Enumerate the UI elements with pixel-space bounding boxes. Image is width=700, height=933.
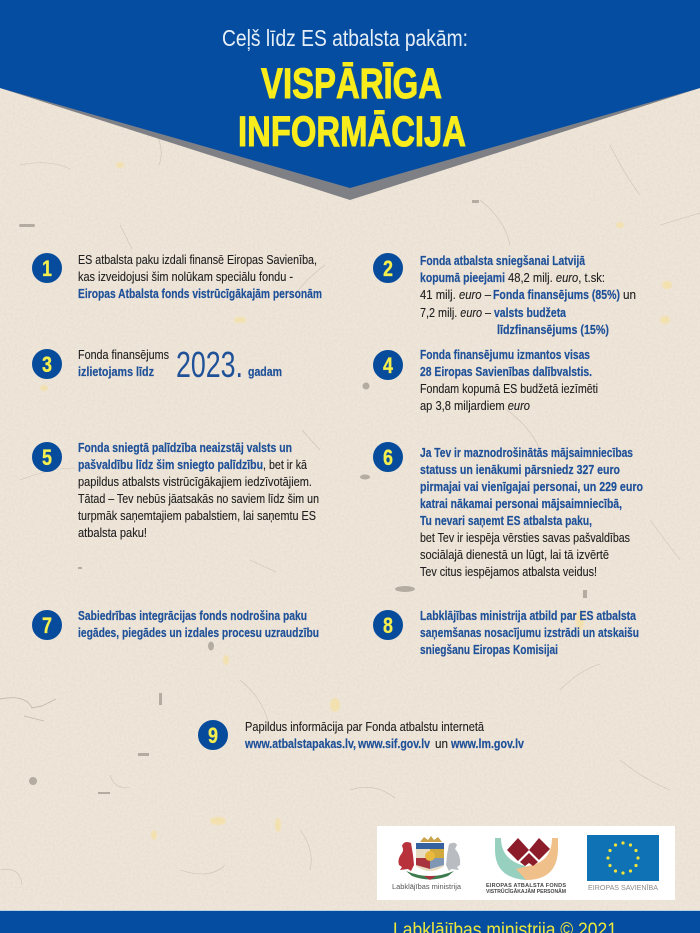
item 4 [374, 347, 598, 413]
number badge 3 [32, 350, 62, 378]
logo: EU flag [587, 835, 659, 881]
text 5: , bet ir kā [263, 457, 308, 472]
number badge 8 [374, 610, 402, 640]
text 5: papildus atbalsts vistrūcīgākajiem iedzīvotājiem. [78, 474, 312, 489]
text 6: statuss un ienākumi pārsniedz 327 euro [420, 462, 620, 477]
header banner [0, 0, 700, 200]
number badge 1 [32, 254, 62, 282]
text 8 [420, 608, 639, 657]
number badge 9: 9 [208, 723, 218, 748]
text 6 [420, 445, 643, 579]
text 4 [420, 347, 598, 413]
text 6: pirmajai vai vienīgajai personai, un 229 euro [420, 479, 643, 494]
text 9 [244, 719, 525, 751]
number badge 2 [374, 254, 402, 282]
text 2: Fonda atbalsta sniegšanai Latvijā [420, 253, 586, 268]
text 6: sociālajā dienestā un lūgt, lai tā izvērtē [420, 547, 609, 562]
logo caption: Labklājības ministrija: Labklājības ministrija [392, 882, 462, 891]
title [238, 60, 466, 156]
logo caption: fund name [486, 883, 566, 895]
text 1: kas izveidojusi šim nolūkam speciālu fondu - [78, 269, 293, 284]
number badge 8: 8 [383, 613, 393, 638]
logo: Latvian coat of arms [398, 836, 460, 880]
number badge 2: 2 [383, 256, 393, 281]
item 1 [32, 252, 322, 301]
text 6: bet Tev ir iespēja vērsties savas pašvaldības [420, 530, 630, 545]
text 2: līdzfinansējums (15%) [497, 322, 609, 337]
item 8 [374, 608, 639, 657]
number badge 6 [374, 442, 402, 472]
text 9: un [435, 736, 448, 751]
text 3: gadam [248, 364, 282, 379]
text 5: turpmāk saņemtajiem pabalstiem, lai saņemtu ES [78, 508, 316, 523]
title: VISPĀRĪGA [261, 60, 442, 108]
text 3 [78, 344, 282, 385]
text 7: iegādes, piegādes un izdales procesu uzraudzību [78, 625, 319, 640]
text 5 [78, 440, 319, 540]
text 4: Fonda finansējumu izmantos visas [420, 347, 590, 362]
title: INFORMĀCIJA [238, 108, 466, 156]
number badge 6: 6 [383, 445, 393, 470]
number badge 9 [198, 720, 228, 750]
item 9 [198, 719, 525, 751]
text 6: Tu nevari saņemt ES atbalsta paku, [420, 513, 592, 528]
text 1 [78, 252, 322, 301]
number badge 5: 5 [42, 445, 52, 470]
text 8: saņemšanas nosacījumu izstrādi un atskaišu [420, 625, 639, 640]
text 5: Fonda sniegtā palīdzība neaizstāj valsts un [78, 440, 292, 455]
text 3: Fonda finansējums [78, 347, 169, 362]
text 9: www.atbalstapakas.lv, [244, 736, 356, 751]
logo panel [377, 826, 675, 900]
text 2: Fonda finansējums (85%) [493, 287, 620, 302]
text 6: katrai nākamai personai mājsaimniecībā, [420, 496, 622, 511]
text 8: Labklājības ministrija atbild par ES atbalsta [420, 608, 637, 623]
text 4: ap 3,8 miljardiem euro [420, 398, 530, 413]
logo: fund hands and diamonds [495, 838, 558, 880]
item 6 [374, 442, 643, 579]
footer bar [0, 910, 700, 933]
text 2: un [623, 287, 636, 302]
text 3: izlietojams līdz [78, 364, 154, 379]
item 7 [32, 608, 319, 640]
number badge 5 [32, 442, 62, 472]
text 5: atbalsta paku! [78, 525, 147, 540]
number badge 7: 7 [42, 613, 52, 638]
logo caption: Eiropas Savienība: EIROPAS SAVIENĪBA [588, 883, 658, 892]
text 2: 41 milj. euro – [420, 287, 492, 302]
banner shadow [0, 88, 700, 200]
text 5: Tātad – Tev nebūs jāatsakās no saviem līdz šim un [78, 491, 319, 506]
text 6: Ja Tev ir maznodrošinātās mājsaimniecības [420, 445, 633, 460]
number badge 3: 3 [42, 352, 52, 377]
logo caption: fund name: EIROPAS ATBALSTA FONDS [486, 883, 566, 889]
text 4: Fondam kopumā ES budžetā iezīmēti [420, 381, 598, 396]
text 9: www.lm.gov.lv [450, 736, 525, 751]
text 2: 48,2 milj. euro, t.sk: [508, 270, 605, 285]
text 5: pašvaldību līdz šim sniegto palīdzību [78, 457, 263, 472]
number badge 4: 4 [383, 353, 394, 378]
item 5 [32, 440, 319, 540]
year 2023: 2023. [176, 344, 243, 385]
text 4: 28 Eiropas Savienības dalībvalstis. [420, 364, 592, 379]
number badge 7 [32, 610, 62, 640]
text 9: Papildus informācija par Fonda atbalstu internetā [245, 719, 485, 734]
subtitle: Ceļš līdz ES atbalsta pakām: [222, 25, 468, 51]
text 1: Eiropas Atbalsta fonds vistrūcīgākajām personām [78, 286, 322, 301]
text 7: Sabiedrības integrācijas fonds nodrošina paku [78, 608, 307, 623]
text 8: sniegšanu Eiropas Komisijai [420, 642, 558, 657]
text 7 [78, 608, 319, 640]
text 2: valsts budžeta [494, 305, 567, 320]
logo caption: fund name: VISTRŪCĪGĀKAJĀM PERSONĀM [486, 888, 566, 895]
number badge 1: 1 [42, 256, 52, 281]
text 6: Tev citus iespējamos atbalsta veidus! [420, 564, 597, 579]
number badge 4 [374, 350, 402, 380]
text 1: ES atbalsta paku izdali finansē Eiropas Savienība, [78, 252, 317, 267]
text 2: kopumā pieejami [420, 270, 505, 285]
item 3 [32, 344, 282, 385]
text 9: www.sif.gov.lv [357, 736, 431, 751]
text 2 [420, 253, 636, 337]
banner shape [0, 0, 700, 188]
text 2: 7,2 milj. euro – [420, 305, 492, 320]
item 2 [374, 253, 636, 337]
